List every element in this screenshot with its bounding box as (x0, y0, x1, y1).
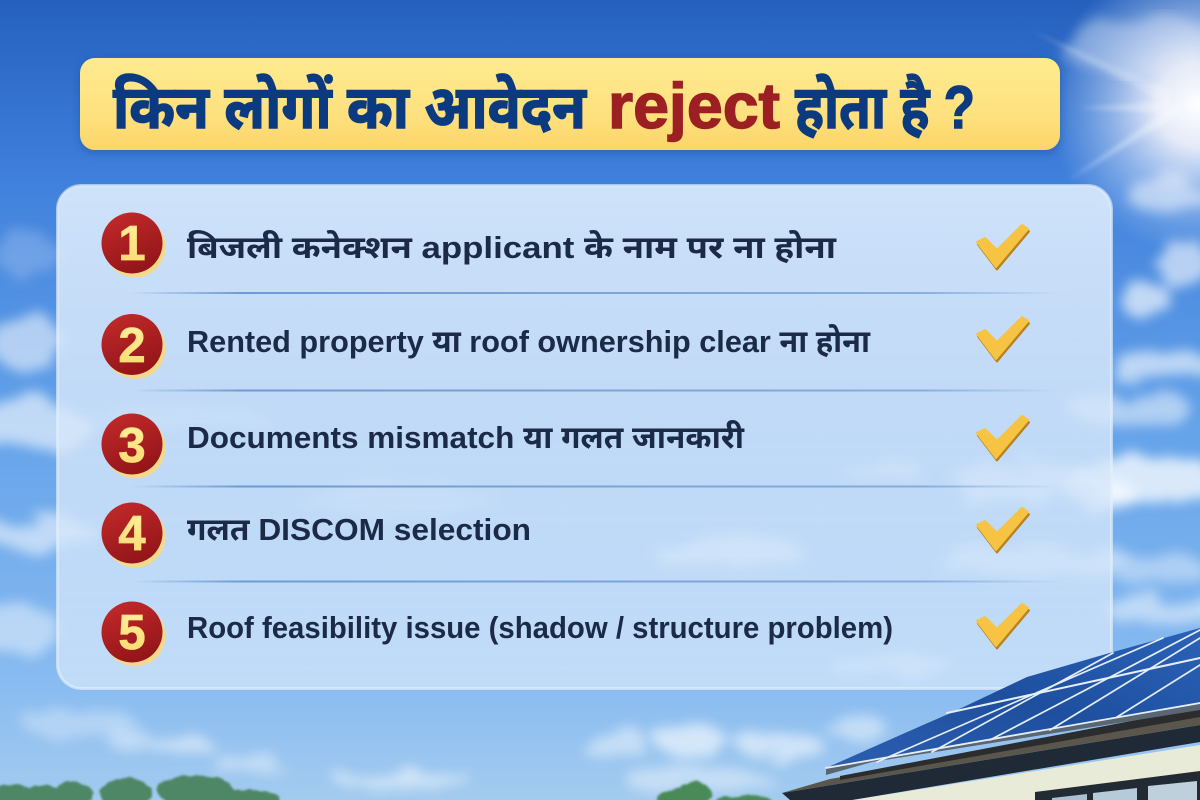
text 1: बिजली कनेक्शन applicant के नाम पर ना होना (187, 230, 837, 265)
badge 1 (102, 212, 166, 278)
badge 4 (102, 502, 166, 568)
title text: किन लोगों का आवेदन (113, 74, 587, 141)
row 4 (102, 502, 1029, 568)
check 1 (977, 225, 1029, 270)
check 3 (977, 416, 1029, 460)
row 2 (102, 314, 1029, 379)
sun glare (1030, 0, 1200, 255)
check 5 (977, 604, 1029, 648)
badge 3 (102, 414, 166, 478)
panel mounting rail (826, 703, 1200, 775)
trees left (0, 776, 280, 800)
shadow gap under panels (840, 708, 1200, 780)
badge 5: 5 (118, 606, 146, 660)
trees right (658, 782, 773, 800)
roof fascia (782, 725, 1200, 800)
title banner (80, 58, 1060, 150)
badge 5 (102, 602, 166, 666)
badge 2: 2 (118, 319, 146, 373)
badge 4: 4 (118, 507, 146, 561)
text 5: Roof feasibility issue (shadow / structure problem) (187, 610, 893, 645)
house with solar panels (782, 628, 1200, 800)
row 5 (102, 602, 1029, 666)
clouds (0, 179, 1200, 791)
check 2 (977, 317, 1029, 362)
window (1035, 771, 1200, 800)
text 4: गलत DISCOM selection (187, 512, 531, 547)
text 3: Documents mismatch या गलत जानकारी (187, 420, 745, 455)
badge 3: 3 (118, 419, 146, 473)
title text: reject (608, 70, 780, 142)
title text (113, 70, 975, 142)
badge 1: 1 (118, 217, 146, 271)
house wall (852, 745, 1200, 800)
badge 2 (102, 314, 166, 379)
panel: reject reasons (58, 186, 1112, 688)
roof tiles (782, 716, 1200, 793)
check 4 (977, 508, 1029, 552)
text 2: Rented property या roof ownership clear ना होना (187, 324, 871, 359)
row 3 (102, 414, 1029, 478)
solar panel array (826, 628, 1200, 768)
title text: होता है ? (795, 74, 975, 141)
row 1 (102, 212, 1029, 278)
